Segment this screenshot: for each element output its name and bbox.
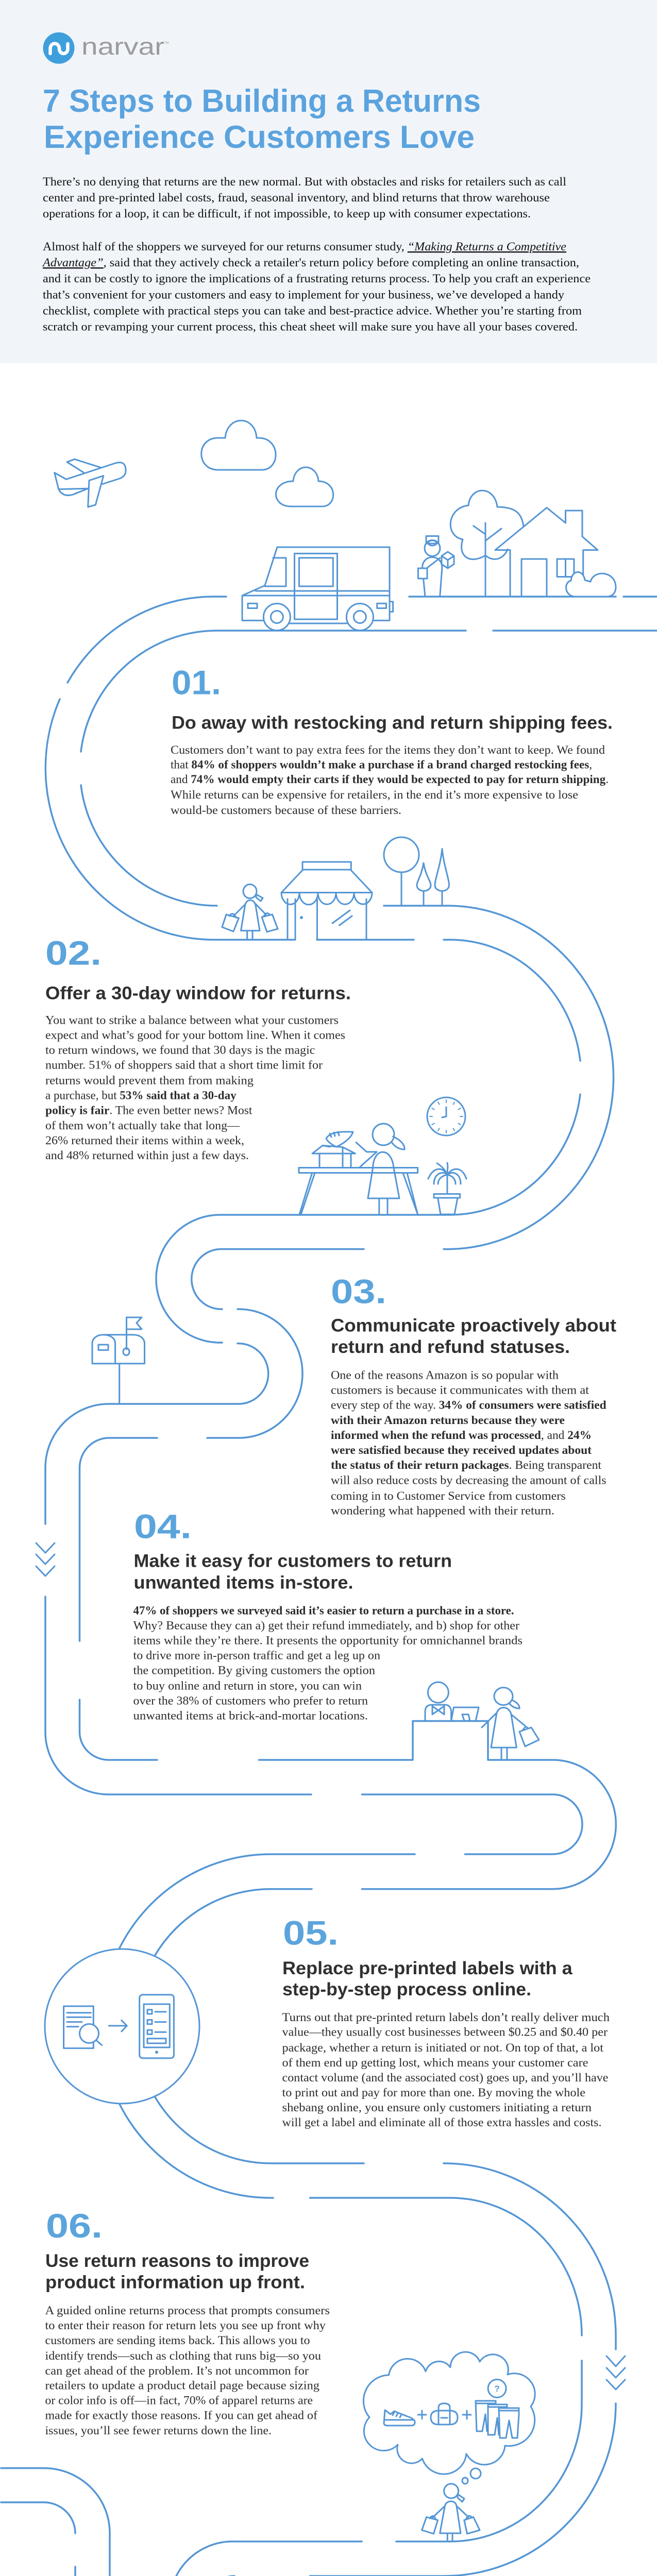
body 02: You want to strike a balance between what your customers (45, 1014, 339, 1027)
body 03: coming in to Customer Service from customers (331, 1489, 566, 1502)
heading 05 (282, 1958, 572, 1999)
body 06: or color info is off—in fact, 70% of apparel returns are (45, 2394, 313, 2407)
text block: intro paragraph 2: Advantage”, said that they actively check a retailer's return policy before completing an online transaction, (42, 256, 579, 269)
body 04: 47% of shoppers we surveyed said it’s easier to return a purchase in a store. (133, 1604, 514, 1617)
body 02: returns would prevent them from making (45, 1074, 254, 1087)
text block: intro paragraph 2: checklist, complete with practical steps you can take and best-practice advice. Whether you’re starting from (43, 304, 582, 317)
body 04: Why? Because they can a) get their refund immediately, and b) shop for other (133, 1619, 519, 1632)
body 05: package, whether a return is initiated or not. On top of that, a lot (282, 2041, 604, 2054)
body 02: expect and what’s good for your bottom line. When it comes (45, 1029, 345, 1042)
body 05: shebang online, you ensure only customers initiating a return (282, 2101, 592, 2114)
arrow: document to phone (109, 2020, 127, 2031)
illustration: delivery person with parcel (418, 536, 454, 597)
icon: shoe (384, 2410, 415, 2426)
step 02 (45, 934, 351, 1162)
body 04 (133, 1604, 523, 1722)
heading 05: step-by-step process online. (282, 1979, 531, 1999)
body 02 (45, 1014, 345, 1162)
icon: plus (463, 2411, 471, 2419)
body 02: policy is fair. The even better news? Most (45, 1104, 252, 1116)
body 01: and 74% would empty their carts if they would be expected to pay for return shipping. (171, 773, 609, 786)
text block: intro paragraph 2: and it can be costly to ignore the implications of a frustrating returns process. To help you craft an experience (43, 272, 591, 285)
body 06 (45, 2304, 330, 2437)
body 06: issues, you’ll see fewer returns down the line. (45, 2424, 272, 2437)
number 06: 06. (46, 2207, 103, 2245)
body 05 (282, 2011, 610, 2129)
body 01: would-be customers because of these barriers. (171, 804, 401, 817)
body 04: over the 38% of customers who prefer to return (133, 1694, 368, 1707)
body 03: the status of their return packages . Being transparent (331, 1459, 602, 1471)
body 05: of them end up getting lost, which means your customer care (282, 2056, 588, 2069)
number 02: 02. (45, 934, 102, 972)
text block: intro paragraph 2: Almost half of the shoppers we surveyed for our returns consumer study, “Making Returns a Competitive (43, 240, 566, 253)
arrow: chevrons right (607, 2356, 625, 2389)
number 01: 01. (172, 664, 221, 702)
heading 06: Use return reasons to improve (45, 2251, 309, 2271)
body 02: to return windows, we found that 30 days is the magic (45, 1044, 315, 1057)
step 05 (282, 1913, 610, 2129)
step 04 (133, 1507, 523, 1722)
text block: intro paragraph 2 (42, 240, 591, 334)
step 01 (171, 664, 613, 817)
illustration: shopper with bags (222, 884, 278, 940)
body 03: informed when the refund was processed , and 24% (331, 1429, 592, 1442)
icon: document with magnifier (64, 2006, 102, 2048)
icon: mailbox (92, 1317, 144, 1404)
number 03: 03. (331, 1273, 386, 1311)
body 01 (171, 743, 609, 817)
text block: intro paragraph 1: There’s no denying that returns are the new normal. But with obstacles and risks for retailers such as call (43, 175, 566, 189)
body 02: and 48% returned within just a few days. (45, 1149, 249, 1162)
body 01: that 84% of shoppers wouldn’t make a purchase if a brand charged restocking fees, (171, 758, 592, 771)
body 02: number. 51% of shoppers said that a short time limit for (45, 1058, 323, 1072)
illustration: shopper thinking (422, 2484, 480, 2541)
title (43, 83, 481, 155)
question mark bubble (488, 2379, 506, 2398)
heading 03: Communicate proactively about (331, 1316, 616, 1336)
heading 05: Replace pre-printed labels with a (282, 1958, 572, 1978)
body 06: customers are sending items back. This allows you to (45, 2334, 310, 2347)
body 04: to drive more in-person traffic and get a leg up on (133, 1649, 381, 1662)
bubble outline (363, 2352, 535, 2474)
body 05: contact volume (and the associated cost) goes up, and you’ll have (282, 2071, 608, 2084)
body 05: value—they usually cost businesses between $0.25 and $0.40 per (282, 2026, 608, 2039)
text block: intro paragraph 2: scratch or revamping your current process, this cheat sheet will make sure you have all your bases covered. (43, 320, 578, 334)
icon: airplane (55, 459, 126, 507)
icon: three pairs of pants (476, 2401, 519, 2438)
icon: small cloud (276, 467, 333, 506)
title: Experience Customers Love (44, 120, 475, 155)
road: winding path through all seven steps (1, 597, 657, 2576)
panel: header background (0, 0, 657, 363)
body 01: While returns can be expensive for retailers, in the end it’s more expensive to lose (171, 788, 578, 801)
title: 7 Steps to Building a Returns (43, 83, 481, 119)
text block: intro paragraph 1: center and pre-printed label costs, fraud, seasonal inventory, and blind returns that throw warehouse (43, 191, 550, 205)
body 03: with their Amazon returns because they were (331, 1414, 565, 1427)
icon: circle with label to phone process (45, 1949, 199, 2104)
illustration: storefront (281, 862, 372, 940)
illustration: delivery truck (242, 547, 393, 631)
thought dots (462, 2468, 481, 2484)
body 06: A guided online returns process that prompts consumers (45, 2304, 330, 2317)
body 06: made for exactly those reasons. If you can get ahead of (45, 2409, 317, 2422)
body 05: Turns out that pre-printed return labels don’t really deliver much (282, 2011, 610, 2024)
text block: intro paragraph 1 (43, 175, 566, 221)
heading 04: Make it easy for customers to return (134, 1551, 452, 1571)
body 03: wondering what happened with their return. (331, 1504, 554, 1517)
body 03: One of the reasons Amazon is so popular with (331, 1368, 559, 1382)
text block: intro paragraph 2: that’s convenient for your customers and easy to implement for your business, we’ve developed a handy (43, 289, 564, 302)
body 01: Customers don’t want to pay extra fees for the items they don’t want to keep. We found (171, 743, 605, 756)
heading 04 (134, 1551, 452, 1592)
body 02: 26% returned their items within a week, (45, 1134, 244, 1147)
illustration: house (495, 507, 616, 597)
illustration: store clerk and customer at counter (425, 1682, 539, 1760)
body 02: a purchase, but 53% said that a 30-day (45, 1089, 237, 1101)
heading 02: Offer a 30-day window for returns. (45, 983, 351, 1004)
heading 04: unwanted items in-store. (134, 1572, 353, 1592)
body 03: every step of the way. 34% of consumers were satisfied (331, 1399, 607, 1412)
heading 01: Do away with restocking and return shipping fees. (172, 713, 613, 733)
body 03: customers is because it communicates with them at (331, 1384, 589, 1397)
logo: narvar: narvar (81, 33, 164, 60)
number 05: 05. (283, 1913, 339, 1952)
heading 03 (331, 1316, 616, 1357)
logo: narvar (43, 32, 169, 64)
body 06: retailers to update a product detail page because sizing (45, 2379, 320, 2392)
heading 06 (45, 2251, 309, 2293)
icon: duffel bag (431, 2403, 458, 2425)
icon: phone with checklist (140, 1995, 174, 2058)
icon: wall clock (427, 1097, 465, 1136)
body 04: items while they’re there. It presents the opportunity for omnichannel brands (133, 1634, 523, 1647)
question mark bubble: ? (494, 2384, 500, 2394)
body 03: were satisfied because they received updates about (331, 1444, 592, 1456)
illustration: tree (450, 490, 524, 597)
number 04: 04. (134, 1507, 192, 1546)
illustration: packing at desk (299, 1124, 418, 1214)
body 02: of them won’t actually take that long— (45, 1119, 240, 1132)
body 04: unwanted items at brick-and-mortar locations. (133, 1709, 368, 1722)
step 03 (331, 1273, 616, 1517)
body 04: to buy online and return in store, you can win (133, 1679, 362, 1692)
text block: intro paragraph 1: operations for a loop, it can be difficult, if not impossible, to keep up with consumer expectations. (43, 207, 531, 221)
body 06: can get ahead of the problem. It’s not uncommon for (45, 2364, 309, 2377)
body 03 (331, 1368, 607, 1517)
body 06: to enter their reason for return lets you see up front why (45, 2319, 326, 2332)
body 03: will also reduce costs by decreasing the amount of calls (331, 1474, 607, 1487)
body 06: identify trends—such as clothing that runs big—so you (45, 2349, 322, 2362)
heading 03: return and refund statuses. (331, 1337, 570, 1357)
illustration: trees near store (384, 837, 449, 906)
logo: narvar: TM (164, 42, 169, 45)
body 04: the competition. By giving customers the option (133, 1664, 376, 1677)
body 05: to print out and pay for more than one. By moving the whole (282, 2086, 585, 2099)
arrow: chevrons left (36, 1543, 55, 1576)
illustration: thought bubble with products (363, 2352, 535, 2484)
step 06 (45, 2207, 330, 2437)
icon: plus (418, 2411, 426, 2419)
heading 06: product information up front. (45, 2273, 305, 2293)
icon: potted palm (428, 1163, 466, 1214)
icon: large cloud (201, 420, 276, 470)
body 05: will get a label and eliminate all of those extra hassles and costs. (282, 2116, 602, 2129)
